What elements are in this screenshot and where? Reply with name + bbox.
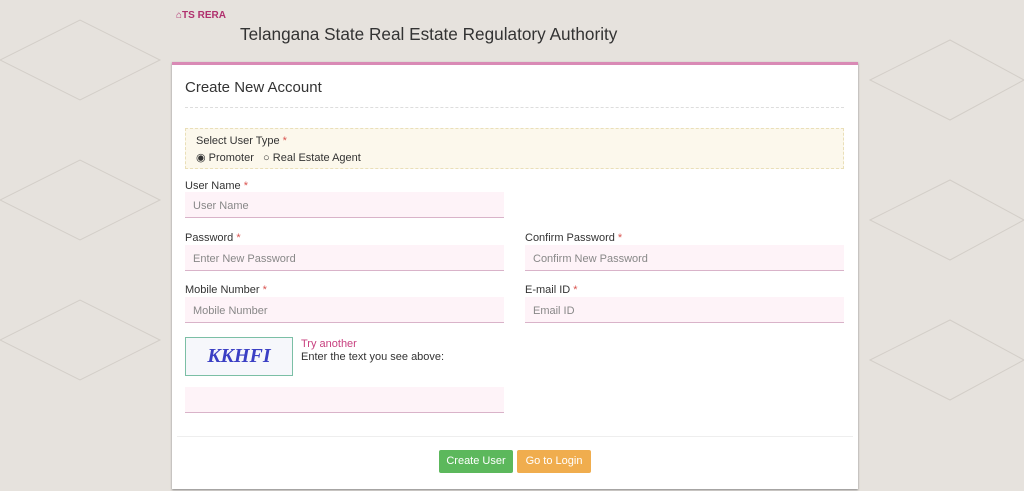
heading: Create New Account: [185, 79, 322, 96]
panel: form: Email ID: [533, 305, 575, 317]
email: E-mail ID *: [525, 284, 578, 296]
panel: form: Mobile Number: [193, 305, 268, 317]
user type box: [185, 128, 844, 169]
captcha text: Try another: [301, 338, 357, 350]
password: Password *: [185, 232, 241, 244]
captcha text: Enter the text you see above:: [301, 351, 444, 363]
header title: Telangana State Real Estate Regulatory Authority: [240, 24, 617, 44]
buttons: Create User: [446, 455, 506, 467]
captcha text: [301, 338, 444, 363]
captcha: KKHFI: [207, 345, 271, 367]
buttons: [439, 450, 513, 473]
user type box: Select User Type *: [196, 135, 287, 147]
user type box: ◉ Promoter ○ Real Estate Agent: [196, 152, 361, 164]
captcha input: [185, 387, 504, 413]
panel: form: User Name: [193, 200, 249, 212]
user name: User Name *: [185, 180, 248, 192]
mobile: Mobile Number *: [185, 284, 267, 296]
panel: form: Enter New Password: [193, 253, 296, 265]
captcha: [185, 337, 293, 376]
panel: form: [172, 62, 858, 489]
logo: ⌂TS RERA: [176, 10, 226, 21]
panel: form: Go to Login: [526, 455, 582, 467]
panel: form: Confirm New Password: [533, 253, 648, 265]
confirm password: Confirm Password *: [525, 232, 622, 244]
